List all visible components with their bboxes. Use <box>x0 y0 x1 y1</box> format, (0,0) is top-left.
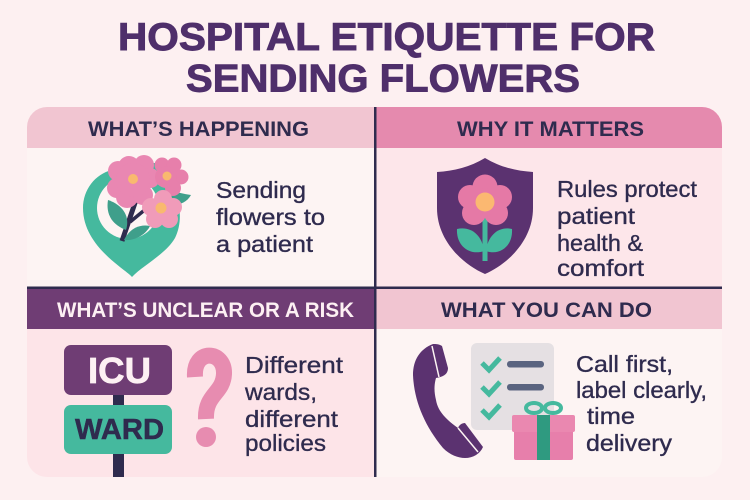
icon: checklist <box>471 343 554 430</box>
header: why it matters <box>375 107 722 148</box>
text: what's unclear: policies <box>245 430 326 456</box>
text: what's unclear <box>244 352 344 456</box>
icon: ward signpost: WARD <box>75 414 164 446</box>
text: what you can do: Call first, <box>576 351 673 377</box>
text: why it matters: patient <box>557 203 636 229</box>
text: why it matters: Rules protect <box>557 176 698 202</box>
header: what's happening: WHAT’S HAPPENING <box>88 117 309 141</box>
card grid <box>27 107 722 477</box>
text: what's unclear: Different <box>245 352 344 378</box>
panel: why it matters <box>375 107 722 288</box>
header: what's happening <box>27 107 375 148</box>
text: what's happening <box>216 177 325 257</box>
header: what you can do <box>375 288 722 329</box>
icon: ward signpost: ICU <box>88 350 151 391</box>
panel: what's happening <box>27 107 375 288</box>
text: what's unclear: different <box>245 406 339 432</box>
text: what you can do: label clearly, <box>576 377 707 403</box>
icon: question mark <box>195 356 224 447</box>
text: why it matters: comfort <box>557 255 645 281</box>
icon: flowers on location pin <box>83 155 191 277</box>
icon: telephone <box>413 344 483 458</box>
text: what you can do: time <box>587 403 635 429</box>
text: what you can do: delivery <box>586 430 673 456</box>
header: why it matters: WHY IT MATTERS <box>457 117 644 141</box>
header: what's unclear <box>27 288 375 329</box>
text: what's unclear: wards, <box>244 379 317 405</box>
text: why it matters: health & <box>557 230 643 256</box>
panel: what you can do <box>375 288 722 477</box>
header: what you can do: WHAT YOU CAN DO <box>441 298 652 322</box>
title: SENDING FLOWERS <box>186 58 580 100</box>
icon: shield with flower <box>437 158 533 274</box>
title: HOSPITAL ETIQUETTE FOR <box>118 16 655 59</box>
title <box>118 16 655 100</box>
icon: gift box <box>512 403 575 460</box>
header: what's unclear: WHAT’S UNCLEAR OR A RISK <box>57 298 354 322</box>
icon: ward signpost <box>64 345 172 477</box>
text: what's happening: flowers to <box>216 204 325 230</box>
panel: what's unclear or a risk <box>27 288 375 477</box>
text: what's happening: a patient <box>216 231 314 257</box>
text: what you can do <box>576 351 707 456</box>
text: why it matters <box>557 176 698 281</box>
text: what's happening: Sending <box>216 177 306 203</box>
